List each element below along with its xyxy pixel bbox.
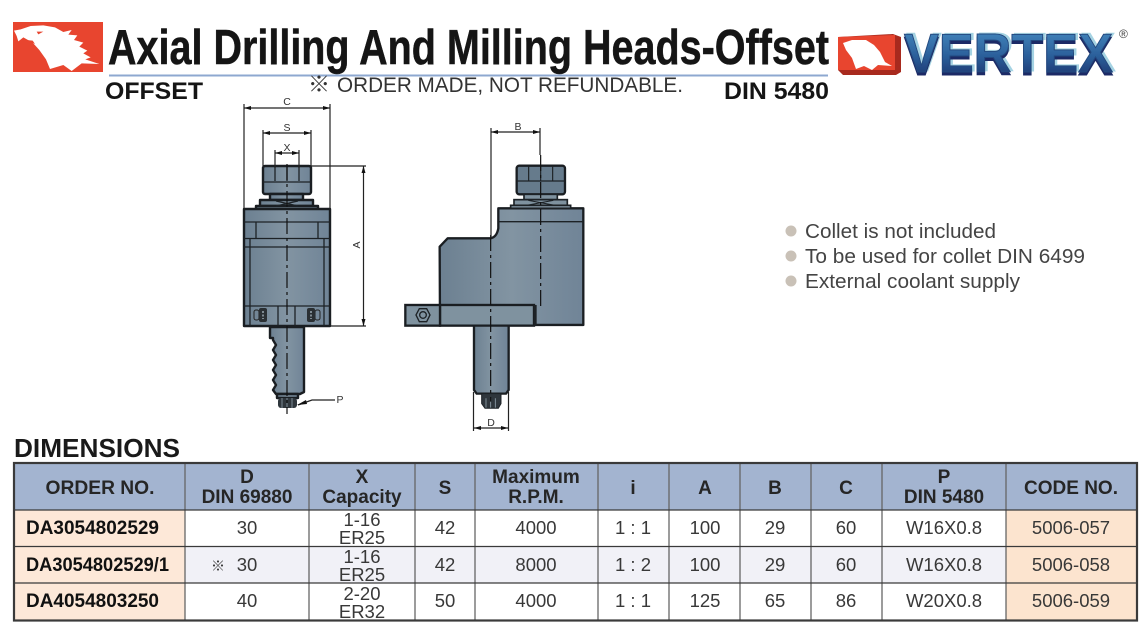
dimension S	[263, 122, 311, 166]
collet nut	[511, 166, 571, 208]
offset body	[440, 208, 583, 325]
header row: DIN 5480	[904, 487, 984, 508]
grid	[185, 463, 1006, 620]
dimension B	[491, 121, 540, 238]
row 3: 4000	[515, 590, 557, 611]
row 2: 29	[765, 554, 785, 575]
header row	[46, 467, 1118, 508]
dimension D	[474, 392, 508, 431]
row 3: ER32	[339, 601, 385, 622]
dimension A: A	[351, 241, 363, 249]
dimension P: P	[336, 394, 344, 406]
dimension X	[275, 142, 299, 168]
dimension A	[311, 166, 366, 326]
header row: A	[698, 478, 712, 499]
drawing: front view	[244, 96, 366, 414]
row 1: 30	[237, 517, 257, 538]
serrated shank	[270, 327, 304, 394]
row 1: 5006-057	[1032, 517, 1110, 538]
row 3: 1 : 1	[615, 590, 651, 611]
row 3: DA4054803250	[26, 591, 159, 612]
dimension X: X	[283, 142, 291, 154]
header row: P	[938, 467, 951, 488]
row 2: W16X0.8	[906, 554, 982, 575]
row 2: ER25	[339, 564, 385, 585]
row 1	[26, 509, 1110, 548]
clamp bar	[405, 305, 537, 326]
row 3: 125	[690, 590, 720, 611]
collet nut	[256, 166, 318, 210]
subtitle: DIN 5480: DIN 5480	[724, 78, 829, 105]
row 2: 8000	[515, 554, 557, 575]
row 3	[26, 583, 1110, 622]
row 2: 1 : 2	[615, 554, 651, 575]
bullet: collet: Collet is not included	[805, 221, 996, 243]
subtitle: offset: OFFSET	[105, 78, 203, 105]
row 2: 60	[836, 554, 856, 575]
row 2: 100	[690, 554, 720, 575]
centre line	[286, 164, 288, 414]
row 3: 86	[836, 590, 856, 611]
table: dimensions	[14, 463, 1137, 622]
header row: CODE NO.	[1024, 478, 1118, 499]
row 3: 2-20	[343, 583, 381, 604]
bullet: DIN 6499: To be used for collet DIN 6499	[805, 246, 1085, 268]
dimension P	[297, 394, 344, 406]
title rule	[109, 74, 828, 76]
row 1: 1 : 1	[615, 517, 651, 538]
icon: 3D eagle box	[838, 34, 901, 75]
dimension C	[244, 96, 330, 209]
row 2: ※	[211, 558, 225, 574]
logo: red eagle	[13, 22, 103, 72]
logo: Vertex	[838, 22, 1128, 84]
header row: D	[240, 467, 254, 488]
row 2: 42	[435, 554, 455, 575]
header row: ORDER NO.	[46, 478, 154, 499]
row 1: DA3054802529	[26, 518, 159, 539]
row 2: DA3054802529/1	[26, 555, 169, 576]
header row: S	[439, 478, 451, 499]
header row: Capacity	[322, 487, 402, 508]
housing	[244, 209, 330, 326]
header row: i	[630, 478, 636, 499]
dimension S: S	[283, 122, 291, 134]
row 3: 65	[765, 590, 785, 611]
feature list	[786, 221, 1085, 293]
centre lines	[491, 155, 541, 402]
heading: dimensions: DIMENSIONS	[14, 433, 180, 463]
row 2: 30	[237, 554, 257, 575]
shank	[474, 326, 509, 394]
row 3: 50	[435, 590, 455, 611]
title: Axial Drilling And Milling Heads-Offset	[108, 21, 829, 75]
header row: C	[839, 478, 853, 499]
row 2: 5006-058	[1032, 554, 1110, 575]
row 1: 42	[435, 517, 455, 538]
dimension B: B	[514, 121, 522, 133]
table fills	[14, 463, 1137, 620]
row 3: 40	[237, 590, 257, 611]
spline nose	[277, 394, 298, 408]
header row: B	[768, 478, 782, 499]
row 3: 5006-059	[1032, 590, 1110, 611]
header row: Maximum	[492, 467, 580, 488]
wordmark: VERTEX	[904, 22, 1113, 84]
registered mark: ®	[1119, 27, 1128, 41]
notice: order made: ORDER MADE, NOT REFUNDABLE.	[337, 74, 683, 97]
row 3: W20X0.8	[906, 590, 982, 611]
row 1: 100	[690, 517, 720, 538]
spline nose	[482, 394, 501, 408]
dimension D: D	[487, 417, 495, 429]
row 1: 4000	[515, 517, 557, 538]
row 1: ER25	[339, 527, 385, 548]
header row: R.P.M.	[508, 487, 564, 508]
row 1: 60	[836, 517, 856, 538]
notice: order made: ※	[308, 72, 330, 97]
drawing: side view	[405, 121, 583, 431]
header row: X	[356, 467, 369, 488]
row 1: W16X0.8	[906, 517, 982, 538]
header row: DIN 69880	[202, 487, 292, 508]
row 2	[26, 546, 1110, 585]
row 2: 1-16	[343, 546, 381, 567]
row 1: 29	[765, 517, 785, 538]
bullet: coolant: External coolant supply	[805, 271, 1020, 293]
dimension C: C	[283, 96, 291, 108]
row 1: 1-16	[343, 509, 381, 530]
